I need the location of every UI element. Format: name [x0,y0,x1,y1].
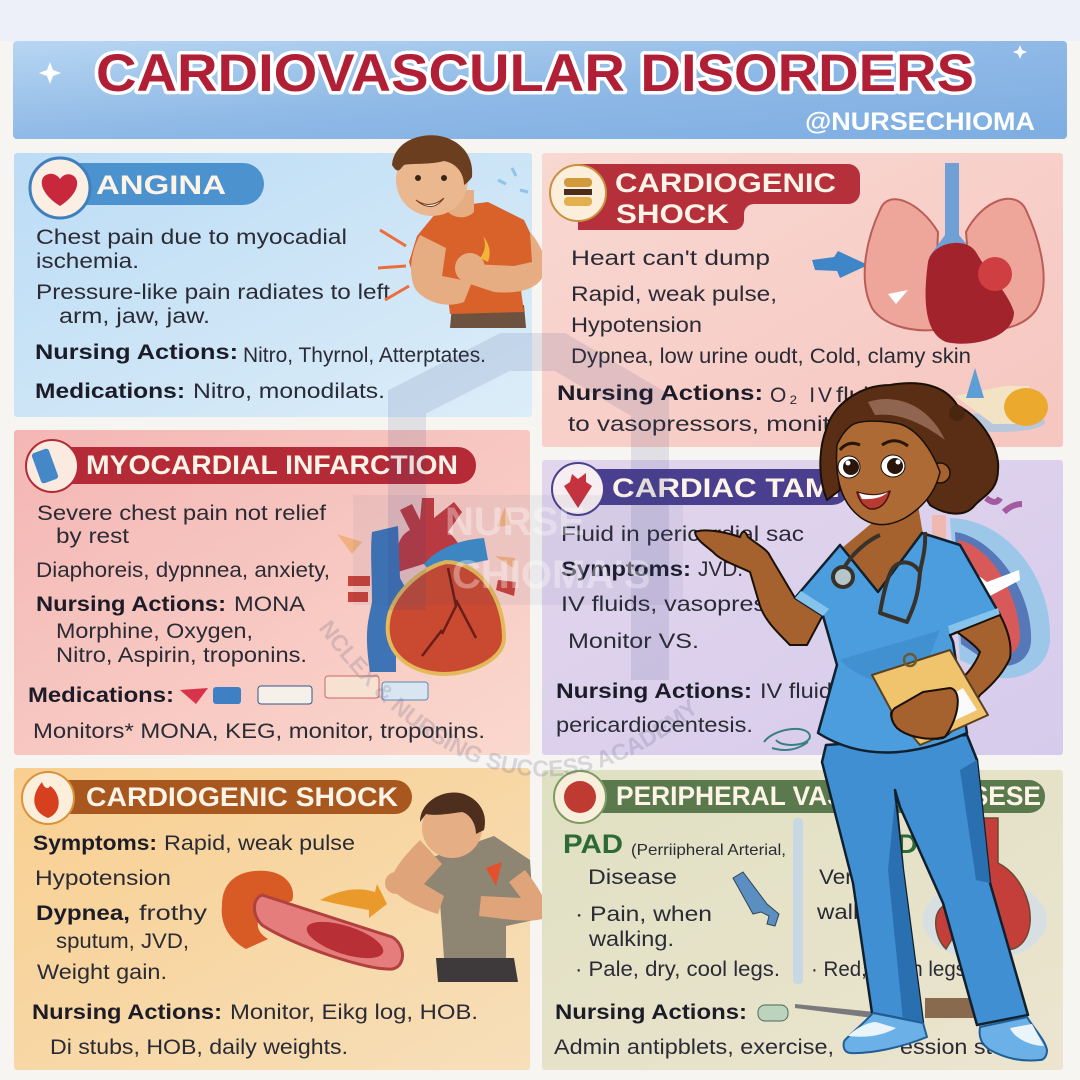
nurse: left shoe [844,1013,927,1053]
text: IV fluids, vasopres [561,593,766,616]
watermark: NURSE [445,500,585,544]
text: Morphine, Oxygen, [56,620,253,643]
nurse: left arm and hand [695,530,823,645]
text: Monitor VS. [568,630,699,653]
illustration: heart in sac [932,498,1050,678]
text: walking. [588,928,674,951]
angina text [35,226,486,403]
nurse: right shoe [980,1017,1047,1061]
text: (Perriipheral Arterial, [631,842,786,859]
angina text: Nitro, monodilats. [193,380,385,403]
text: Nursing Actions: [557,382,763,405]
text: PAD [563,829,623,859]
nurse: right arm [891,615,1011,739]
illustration: man with chest pain [385,792,547,982]
heading: CARDIOGENIC [615,168,836,198]
text: Heart can't dump [571,247,770,270]
heading: SHOCK [616,199,730,229]
text: JVD. [698,558,743,581]
angina text: Nursing Actions: [35,341,238,364]
nurse character [695,383,1047,1061]
text: IV fluid [760,680,832,703]
heading [22,772,412,824]
panel: cardiogenic shock (bottom left) [14,768,547,1070]
text: Hypotension [35,867,171,890]
text: · Red, warm legs [811,958,966,981]
panel: peripheral vascular disease [542,770,1063,1070]
text: fluids [836,384,896,407]
heading [550,164,860,230]
heading [552,463,852,515]
text: Venous [819,866,894,889]
angina text: arm, jaw, jaw. [59,305,210,328]
nurse: stethoscope [833,532,925,622]
illustration: pill bottle [955,368,1048,432]
text: Nursing Actions: [555,1001,747,1024]
illustration: heart and vessels [923,818,1047,960]
heading: CARDIAC TAMP [612,473,852,503]
watermark [319,333,694,776]
nurse: face [836,421,940,525]
angina text: Nitro, Thyrnol, Atterptates. [243,344,486,367]
handle: @NURSECHIOMA [805,108,1035,136]
text: sputum, JVD, [56,930,189,953]
text: Severe chest pain not relief [37,502,326,525]
text: Monitors* MONA, KEG, monitor, troponins. [33,720,485,743]
text: Admin antipblets, exercise, [554,1036,834,1059]
nurse: mouth [857,491,890,509]
watermark: NCLEX & NURSING SUCCESS ACADEMY [319,620,694,776]
illustration: man with chest pain [378,135,545,328]
angina text: Chest pain due to myocadial [36,226,347,249]
text: Nursing Actions: [36,593,226,616]
text: Nursing Actions: [32,1001,222,1024]
text: Symptoms: [561,558,691,581]
text: Nitro, Aspirin, troponins. [56,644,307,667]
title: CARDIOVASCULAR DISORDERS [96,44,974,103]
text: Fluid in pericardial sac [561,523,804,546]
nurse: shoe toes [848,1022,1044,1046]
text: pericardiocentesis. [556,714,753,737]
sparkles [39,45,1027,84]
text [32,832,478,1059]
illustration: pen and tube [795,998,985,1018]
text [554,829,1005,1059]
panel: myocardial infarction [14,430,530,755]
text: Disease [588,866,677,889]
text: VVD [858,829,918,859]
text: O₂ IV [770,384,832,407]
angina text: Medications: [35,380,185,403]
text: Dypnea, low urine oudt, Cold, clamy skin [571,345,971,368]
nurse: hair highlight and bun [868,399,965,440]
nurse: ear [930,463,950,483]
angina text: Pressure-like pain radiates to left [36,281,390,304]
text: by rest [56,525,129,548]
text: Di stubs, HOB, daily weights. [50,1036,348,1059]
text: MONA [234,593,305,616]
text: Weight gain. [37,961,167,984]
nurse: eyes [838,441,908,478]
nurse: scrub top [795,533,1000,752]
illustration: arrow [812,251,868,278]
text: Nursing Actions: [556,680,752,703]
text [557,247,971,436]
icon: pill [758,1005,788,1021]
heading: CARDIOGENIC SHOCK [86,782,399,812]
text: · Pain, when [575,903,712,926]
illustration: blocked artery [222,871,402,969]
heading: MYOCARDIAL INFARCTION [86,450,458,480]
header banner [13,41,1067,139]
text: Rapid, weak pulse, [571,283,777,306]
text: Rapid, weak pulse [164,832,355,855]
nurse: clipboard [872,650,988,745]
illustration: lungs and heart [865,163,1044,344]
text: Diaphoreis, dypnnea, anxiety, [36,559,330,582]
illustration: squiggle [764,729,810,750]
nurse: neck [842,505,924,592]
text: Hypotension [571,314,702,337]
illustration: medications [180,676,428,704]
text: frothy [139,902,208,925]
nurse: hair back [820,383,998,514]
nurse: hand on clipboard [891,688,958,739]
angina heading [30,158,264,218]
panel: angina [14,135,545,417]
heading: PERIPHERAL VASCULAR DISESE [616,781,1041,811]
heading [554,771,1045,823]
angina heading: ANGINA [96,170,226,200]
heading [26,440,476,492]
text: Medications: [28,684,174,707]
text: · Pale, dry, cool legs. [575,958,780,981]
panel: cardiogenic shock (top right) [542,153,1063,447]
icon: thermometer device [733,872,779,926]
illustration: heart [337,498,516,674]
nurse: trousers [822,735,1028,1025]
top page strip [0,0,1080,41]
text: to vasopressors, monitor [568,413,853,436]
text: Dypnea, [36,902,130,925]
divider column [793,818,803,984]
text: ession sto [900,1036,1005,1059]
text: Symptoms: [33,832,157,855]
panel: cardiac tamponade [542,460,1063,755]
text [28,502,485,743]
watermark: CHIOMA'S [452,553,650,597]
text [556,523,832,737]
text: walking [816,901,897,924]
angina text: ischemia. [36,250,139,273]
text: Monitor, Eikg log, HOB. [230,1001,478,1024]
